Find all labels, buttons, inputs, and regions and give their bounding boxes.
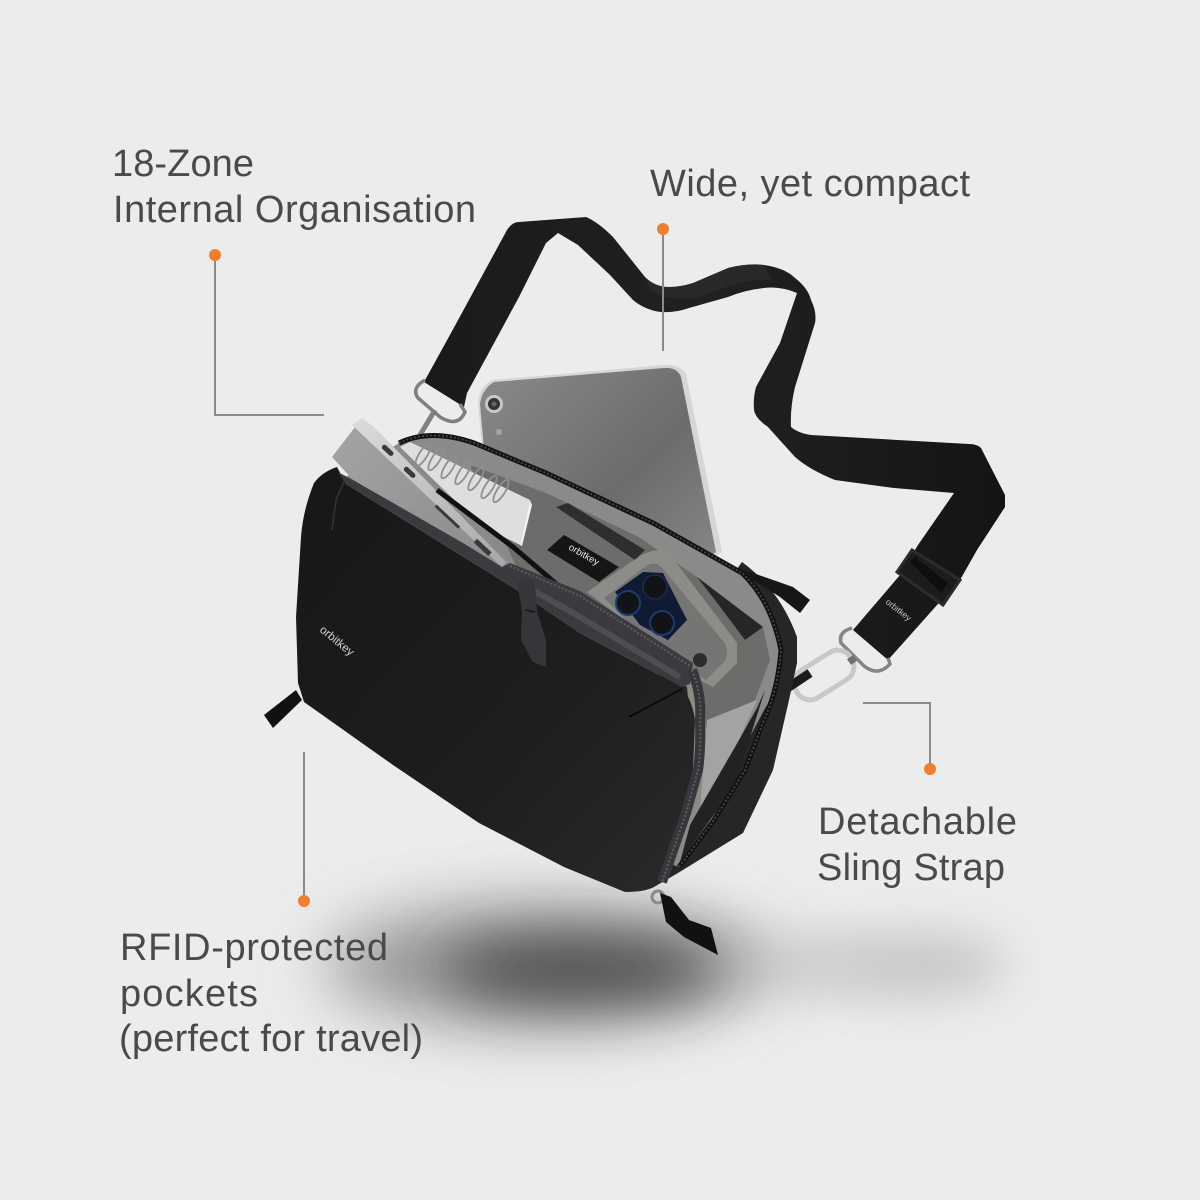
leader line [303,752,305,901]
marker dot [209,249,221,261]
zipper tape band [338,472,693,687]
tag logo: orbitkey [566,542,601,568]
bottom strap tab [652,891,718,955]
strap logo: orbitkey [884,597,914,623]
notebook [400,442,532,546]
phone in case [587,550,737,687]
right side strap tab [743,570,810,613]
phone camera block [615,572,687,640]
drop shadow under bag [325,905,1008,1025]
strap adjuster buckle [897,550,960,605]
label text: Detachable [818,801,1017,843]
label continuation: Sling Strap [817,847,1005,889]
upper swivel loop [416,380,465,435]
label text: Wide, yet compact [650,163,970,205]
interior liner panel [470,465,770,730]
callout: 18-zone internal organisation [112,143,324,415]
callout: RFID-protected pockets [120,752,388,969]
zipper pull [517,578,546,667]
mesh pocket [680,690,765,862]
front zipper [437,490,560,587]
lower swivel loop [840,628,890,671]
label third line: (perfect for travel) [119,1018,423,1060]
leader line [863,703,930,769]
marker dot [657,223,669,235]
hub ports [381,444,492,556]
callout: wide yet compact [650,163,970,351]
interior storage pen [556,503,645,560]
phone side button [693,653,707,667]
front panel crease [629,689,682,717]
rear zipper [399,436,781,867]
bag interior [346,436,781,867]
notebook spiral rings [413,442,511,504]
label text: RFID-protected [120,927,388,969]
shoulder strap [416,217,1005,706]
marker dot [298,895,310,907]
label text: 18-Zone [112,143,254,185]
front logo: orbitkey [317,624,356,659]
tablet camera [485,395,503,435]
front panel seam [332,477,346,530]
dark cavity behind phone [697,577,763,640]
black organiser tag [547,535,619,582]
pocket sleeve [700,700,757,813]
lower left strap tab [264,690,302,728]
zipper piping [662,670,700,882]
label second line: pockets [120,973,258,1015]
front panel of bag [296,467,700,892]
carabiner clip [780,644,860,706]
leader line [662,229,664,351]
leader line [215,255,324,415]
tablet [478,365,722,600]
label continuation: Internal Organisation [113,189,476,231]
marker dot [924,763,936,775]
USB hub [332,418,510,567]
callout: detachable sling strap [818,703,1017,843]
bag rear shell [640,562,797,887]
